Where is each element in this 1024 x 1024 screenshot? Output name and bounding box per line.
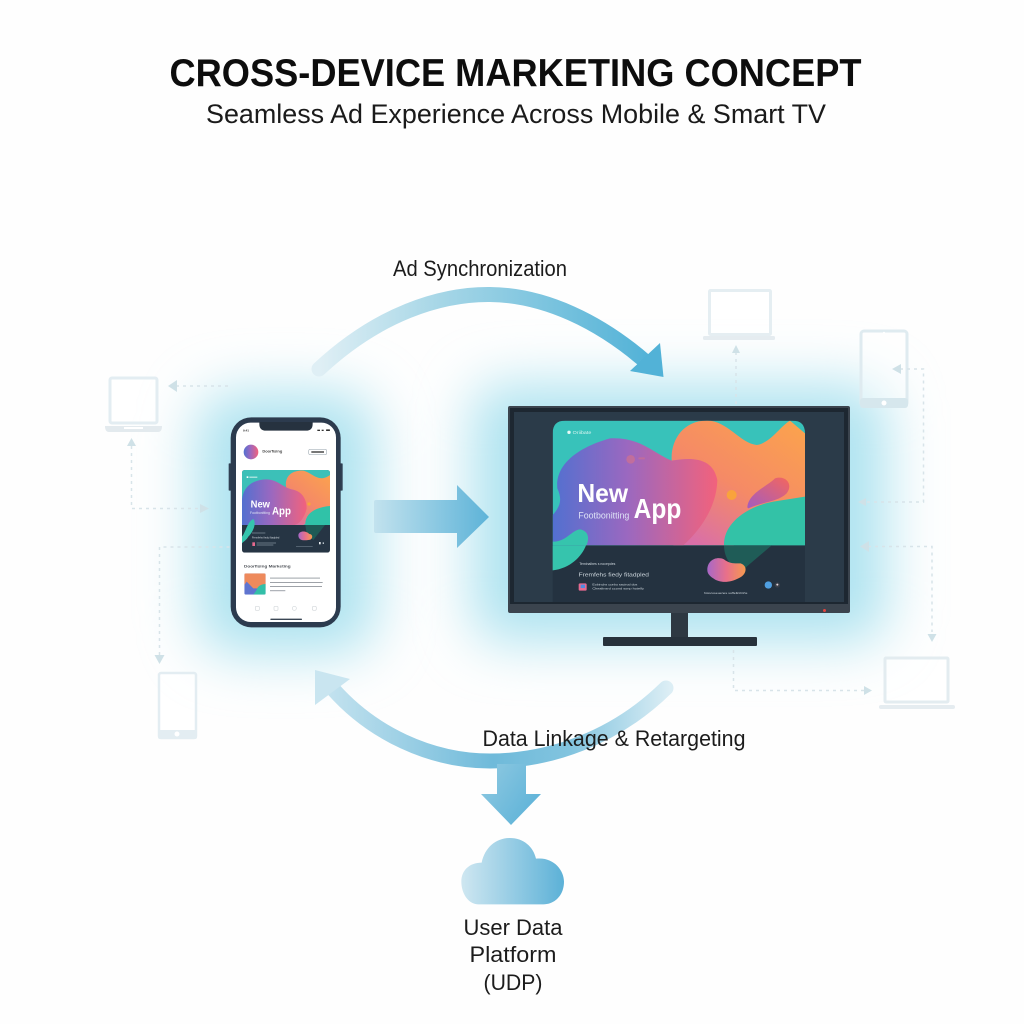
TV bottom text: Chealinsrd ccond sonp hotelfy (592, 587, 645, 591)
label: user data platform: Platform (470, 942, 556, 967)
home indicator (270, 619, 302, 620)
TV headline: New (577, 478, 629, 508)
label: user data platform: (UDP) (484, 970, 542, 995)
phone ad banner: Footbonitting (250, 511, 270, 515)
app header (244, 445, 327, 459)
arrow: down to UDP (481, 764, 541, 825)
phone body (231, 417, 341, 627)
TV small blob (707, 558, 746, 582)
arrow: ad synchronization arc (319, 294, 664, 377)
TV lower panel (553, 543, 805, 602)
subtitle: Seamless Ad Experience Across Mobile & Smart TV (206, 99, 826, 129)
article text lines (270, 578, 323, 591)
connector arrowheads (127, 345, 936, 695)
phone ad banner: App (272, 505, 291, 517)
phone ad banner (242, 470, 330, 553)
TV bottom text: Teminalbes s nocepdes (579, 562, 616, 566)
faint device: laptop bottom right (879, 658, 955, 709)
icon: cloud (461, 838, 564, 904)
faint device: laptop left (105, 378, 162, 432)
dashed connectors (132, 352, 932, 690)
section heading: Doorfising Marketing (244, 565, 291, 569)
TV bottom left teal blob (553, 545, 586, 570)
TV dark green blob (724, 545, 772, 569)
faint device: tablet bottom left (158, 673, 197, 739)
phone screen (236, 423, 336, 622)
TV ad banner: Oriibate (573, 430, 592, 435)
phone ad banner: New (251, 500, 271, 511)
TV power light (823, 609, 826, 612)
phone ad banner: Fremfehs fiedy fitadpled (252, 535, 280, 539)
label: ad synchronization: Ad Synchronization (393, 256, 567, 281)
status bar (243, 429, 330, 433)
thumbnail (244, 573, 266, 595)
faint device: laptop top (703, 290, 775, 340)
TV bottom text (579, 562, 748, 595)
TV headline second word: App (634, 493, 681, 524)
label: user data platform: User Data (464, 915, 563, 940)
TV tagline: Footbonitting (578, 510, 629, 520)
TV bottom text: Fremfehs fiedy fitadpled (579, 572, 649, 578)
faint device: tablet right (860, 331, 908, 408)
arrow: data linkage arc (315, 670, 666, 761)
TV bottom text: Eobinchs ccebu sacirod dos (592, 582, 638, 586)
TV stand (603, 612, 757, 646)
arrow: phone to TV (374, 485, 489, 548)
phone (229, 417, 343, 627)
bottom nav icons (255, 606, 316, 610)
label: user data platform (464, 915, 563, 995)
app header: Doorfising (262, 448, 283, 453)
TV frame (508, 406, 850, 613)
title: CROSS-DEVICE MARKETING CONCEPT (170, 52, 862, 95)
TV screen (514, 412, 844, 602)
label: data linkage: Data Linkage & Retargeting (482, 726, 746, 751)
phone side buttons (229, 463, 343, 491)
TV ad banner (553, 421, 805, 548)
glow: phone halo (196, 392, 376, 654)
TV app icon (579, 583, 587, 591)
TV badges (765, 581, 772, 589)
glow: TV halo (472, 384, 886, 642)
phone notch (259, 422, 313, 431)
TV bottom text: hicocoseuenes suffeltnilinhs (704, 591, 748, 595)
status bar: 9:41 (243, 429, 249, 433)
smart TV (508, 406, 850, 646)
